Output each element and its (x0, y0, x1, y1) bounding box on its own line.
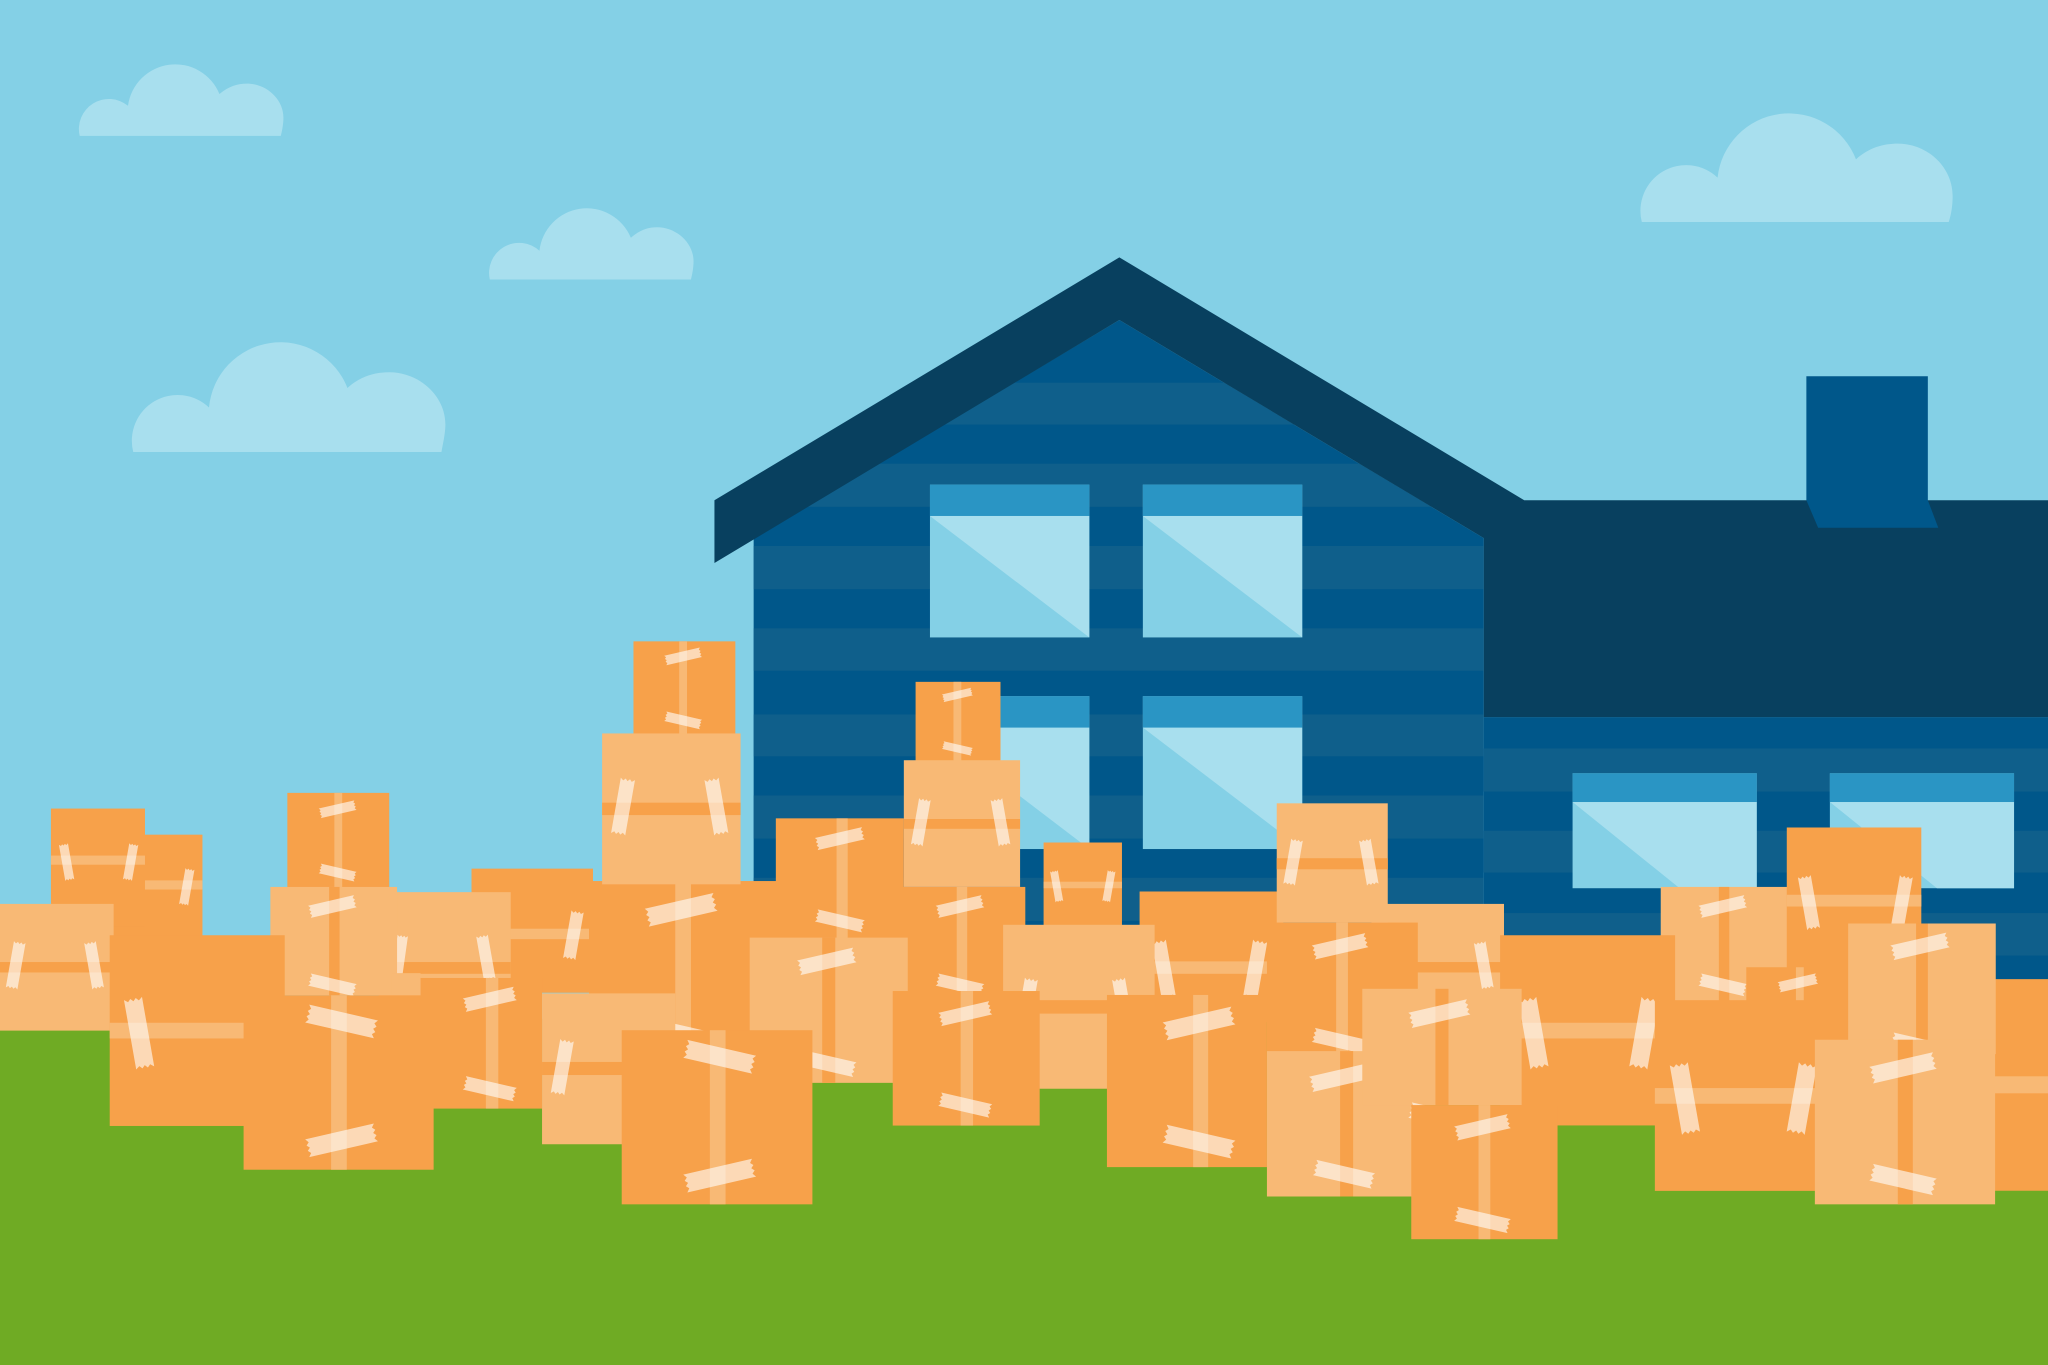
box: orange stack right (1787, 827, 1921, 1004)
house: roof (714, 257, 2048, 717)
box: large right of centre (1500, 935, 1675, 1125)
cloud: top left (79, 64, 283, 136)
box: far left light (0, 904, 114, 1031)
box: centre upper (776, 818, 904, 942)
box: light front left of centre (542, 993, 675, 1144)
window: wing right (1830, 773, 2014, 888)
cloud: left large (132, 342, 445, 452)
box: large front middle (1107, 995, 1267, 1167)
house: front gable wall with siding (754, 320, 1484, 925)
box: far right edge (1959, 979, 2048, 1191)
box: rear orange middle (1140, 891, 1283, 1022)
cloud: right large (1640, 113, 1953, 222)
box: large front centre (622, 1030, 812, 1204)
box: large left (110, 935, 285, 1126)
house: side wing wall with siding (1484, 717, 2048, 993)
box: small front right (1411, 1105, 1558, 1239)
box: small behind right group (1746, 967, 1848, 1006)
box: second stack light (904, 760, 1020, 887)
box: tallest stack top (633, 641, 735, 735)
box: light upper far right (1848, 923, 1996, 1060)
box: far left top (51, 809, 145, 926)
box: third stack top (1044, 843, 1122, 927)
window: upper right (1143, 485, 1302, 637)
box: third stack right light (1277, 803, 1388, 923)
box: light centre left (379, 892, 511, 999)
window: lower right (1143, 696, 1302, 849)
box: large centre (589, 881, 778, 1057)
box: light low right of centre (1267, 1051, 1417, 1196)
window: upper left (930, 485, 1089, 637)
box: light stack middle (270, 887, 421, 996)
box: light upper front right (1362, 989, 1522, 1131)
window: lower left (930, 696, 1089, 849)
box: light stack right (1661, 887, 1787, 1001)
box: light rear right of centre (1371, 904, 1504, 995)
box: large front left (244, 995, 434, 1170)
box: far left rear (91, 835, 202, 952)
box: light centre (750, 938, 908, 1083)
box: second stack top (916, 682, 1000, 763)
house: chimney (1806, 376, 1938, 528)
window: wing left (1573, 773, 1757, 888)
box: small front centre (893, 991, 1040, 1126)
box: orange right of centre (1267, 923, 1418, 1066)
cloud: centre (489, 208, 694, 280)
lawn (0, 1019, 2048, 1365)
box: tallest stack light (602, 733, 741, 884)
box: small front centre left (421, 978, 542, 1109)
box: large right (1655, 1000, 1851, 1191)
box: third stack light (1003, 925, 1155, 1089)
box: second stack lower (896, 887, 1025, 998)
box: orange behind light pair (472, 869, 593, 993)
box: stack top left (287, 793, 389, 891)
box: light front far right (1815, 1040, 1995, 1204)
